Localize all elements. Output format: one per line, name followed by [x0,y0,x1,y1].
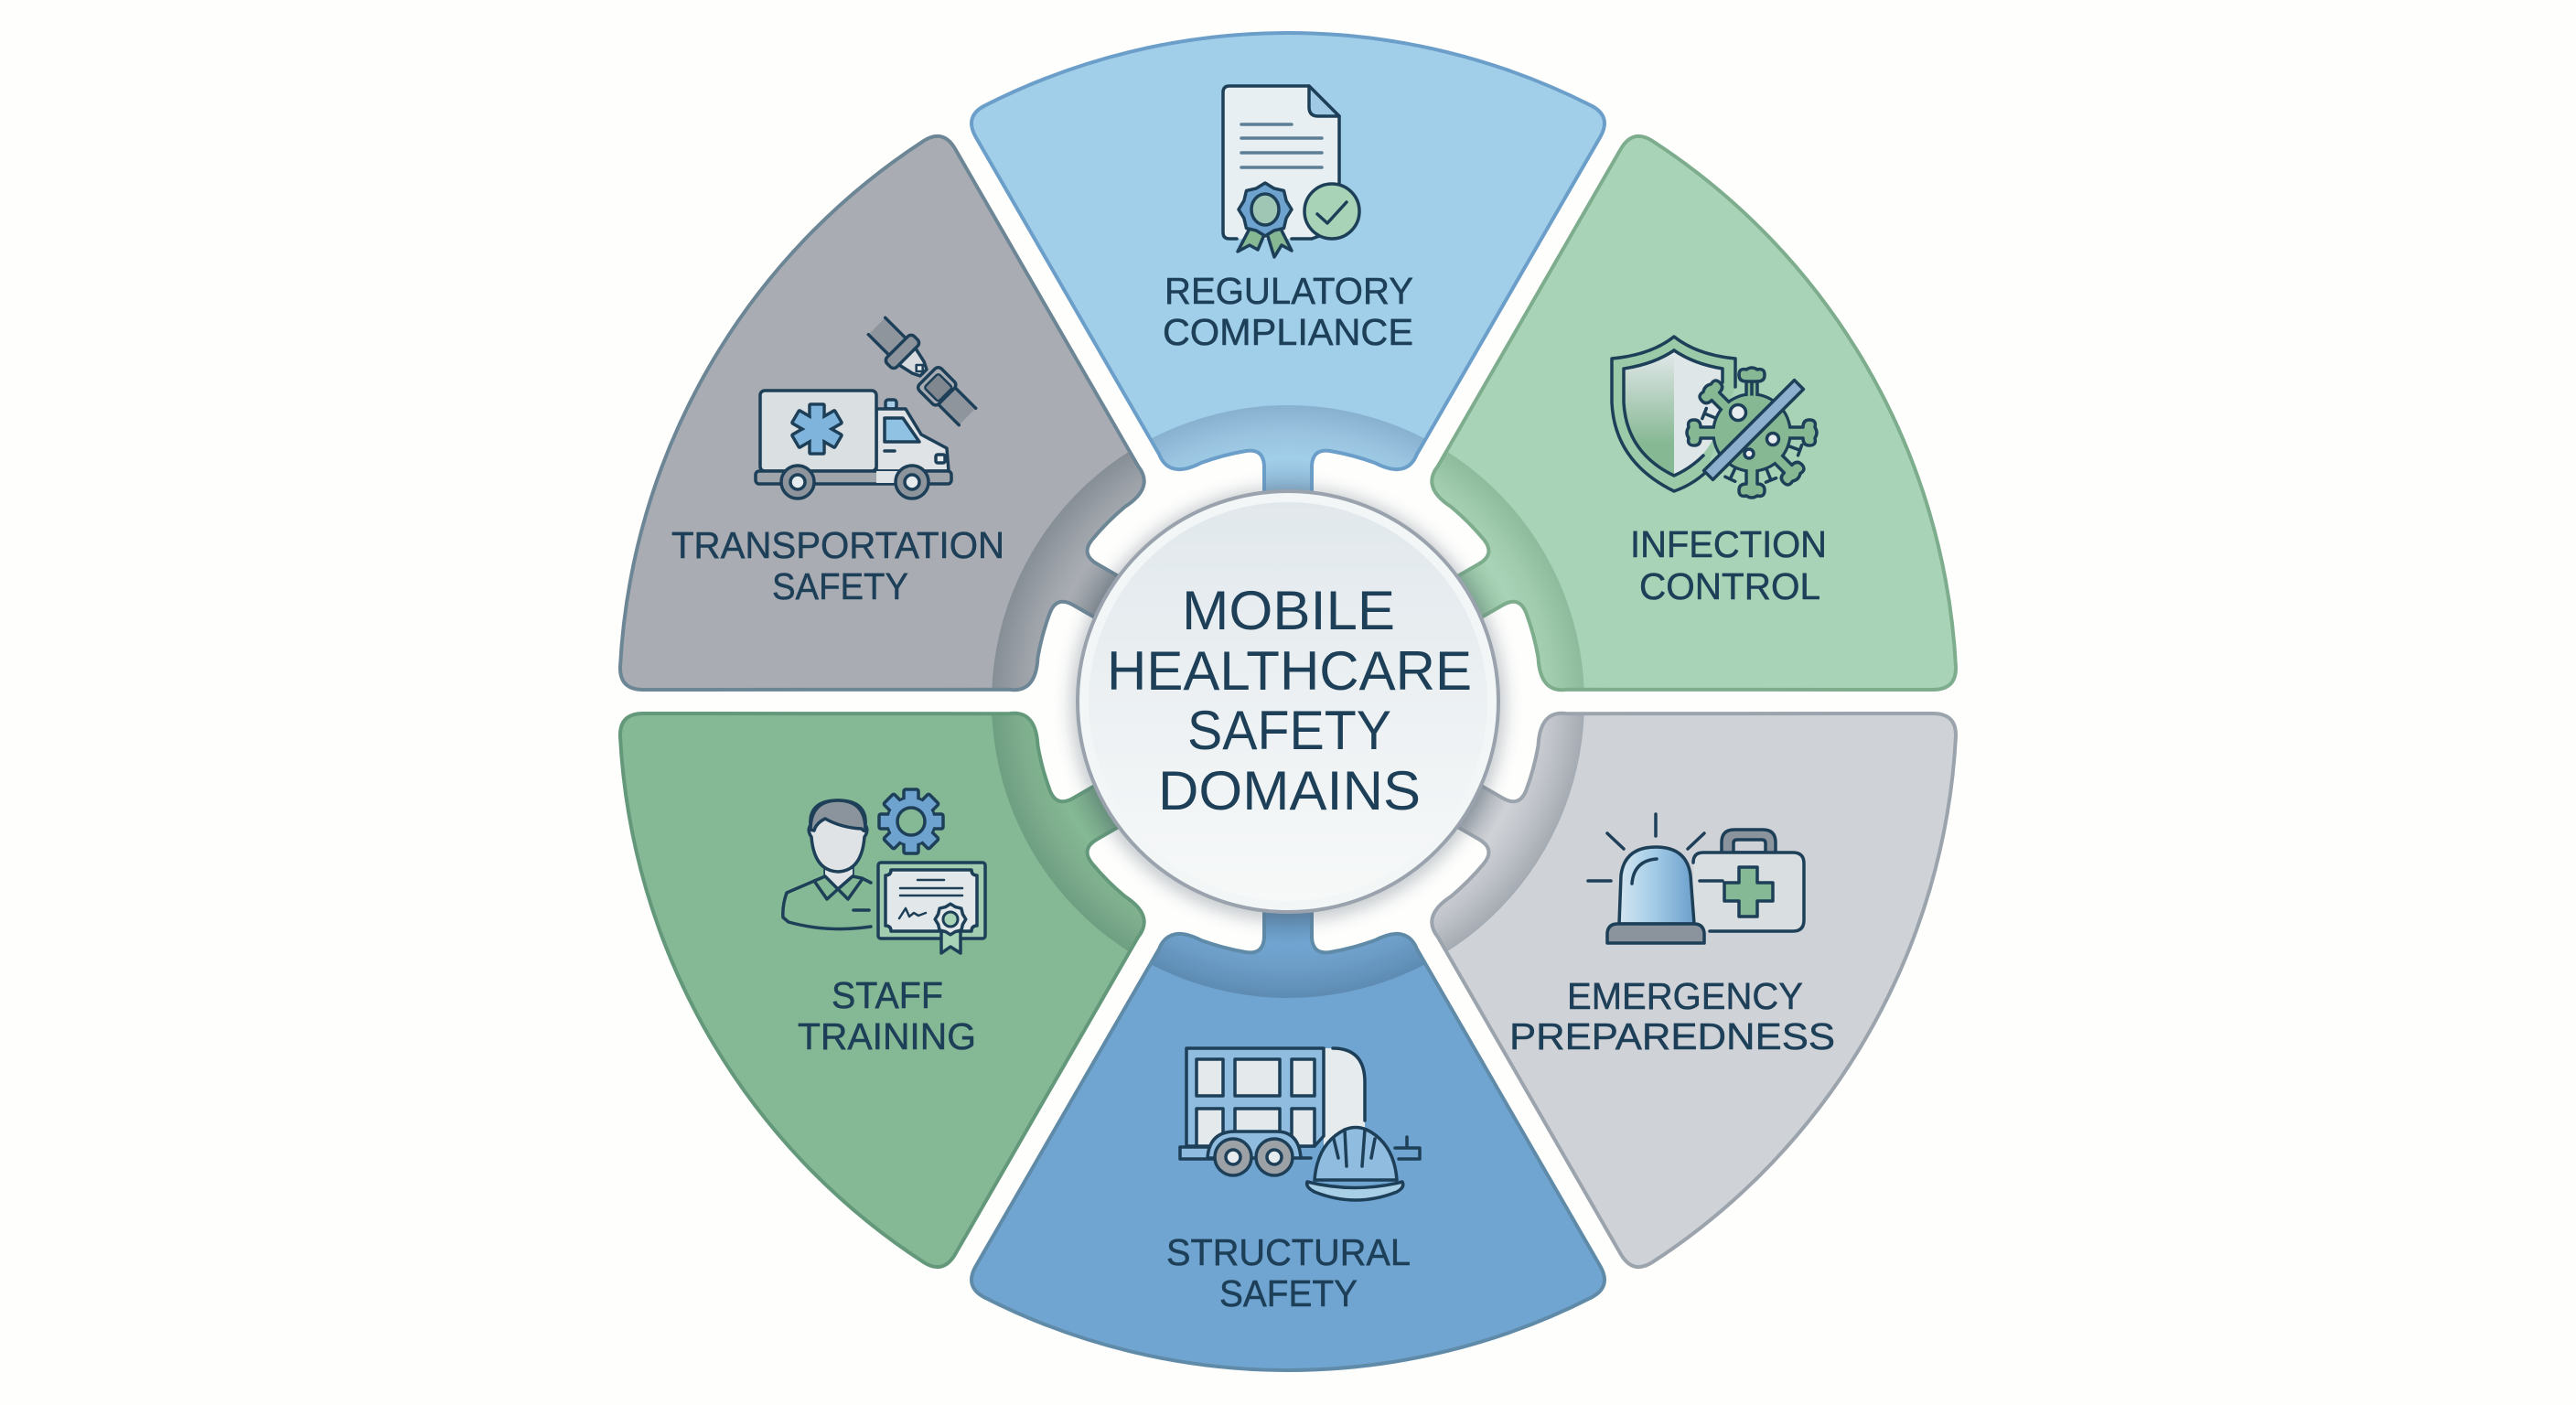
label: infection control: INFECTION [1630,523,1827,565]
segment shape: regulatory compliance [970,31,1606,491]
icon: shield and crossed-out virus [1612,337,1817,498]
icon: seat belt buckle [864,313,981,430]
title: mobile healthcare safety domains: DOMAINS [1158,760,1421,821]
segment shape: structural safety [970,912,1606,1372]
label: structural safety: STRUCTURAL [1166,1231,1411,1273]
panel: emergency preparedness [1430,712,1958,1270]
label: regulatory compliance: REGULATORY [1165,270,1413,312]
title: mobile healthcare safety domains: MOBILE [1182,580,1395,641]
icon: certificate document with rosette and check [1223,86,1359,257]
label: transportation safety: TRANSPORTATION [671,524,1004,566]
panel: regulatory compliance [970,31,1606,491]
hub rim [1078,491,1498,912]
icon: emergency siren and first-aid kit [1588,814,1804,943]
segment shape: transportation safety [618,134,1146,692]
label: transportation safety: SAFETY [772,565,908,607]
label: regulatory compliance: COMPLIANCE [1163,311,1413,353]
panel: staff training [618,712,1146,1270]
label: infection control: CONTROL [1639,565,1820,607]
icon: staff member, gear and certificate [783,789,985,953]
segment shape: infection control [1430,134,1958,692]
label: staff training: STAFF [832,974,943,1016]
icon: mobile trailer frame and hard hat [1180,1048,1420,1200]
panel: transportation safety [618,134,1146,692]
title: mobile healthcare safety domains: SAFETY [1187,700,1391,761]
panel: infection control [1430,134,1958,692]
label: staff training: TRAINING [798,1015,976,1057]
segment shape: emergency preparedness [1430,712,1958,1270]
hub face [1089,502,1487,901]
center hub [1070,487,1506,922]
label: emergency preparedness: EMERGENCY [1567,975,1803,1017]
segment shape: staff training [618,712,1146,1270]
icon: ambulance [756,391,951,499]
panel: structural safety [970,912,1606,1372]
label: emergency preparedness: PREPAREDNESS [1509,1015,1835,1057]
label: structural safety: SAFETY [1219,1272,1358,1314]
title: mobile healthcare safety domains: HEALTHCARE [1107,640,1472,702]
